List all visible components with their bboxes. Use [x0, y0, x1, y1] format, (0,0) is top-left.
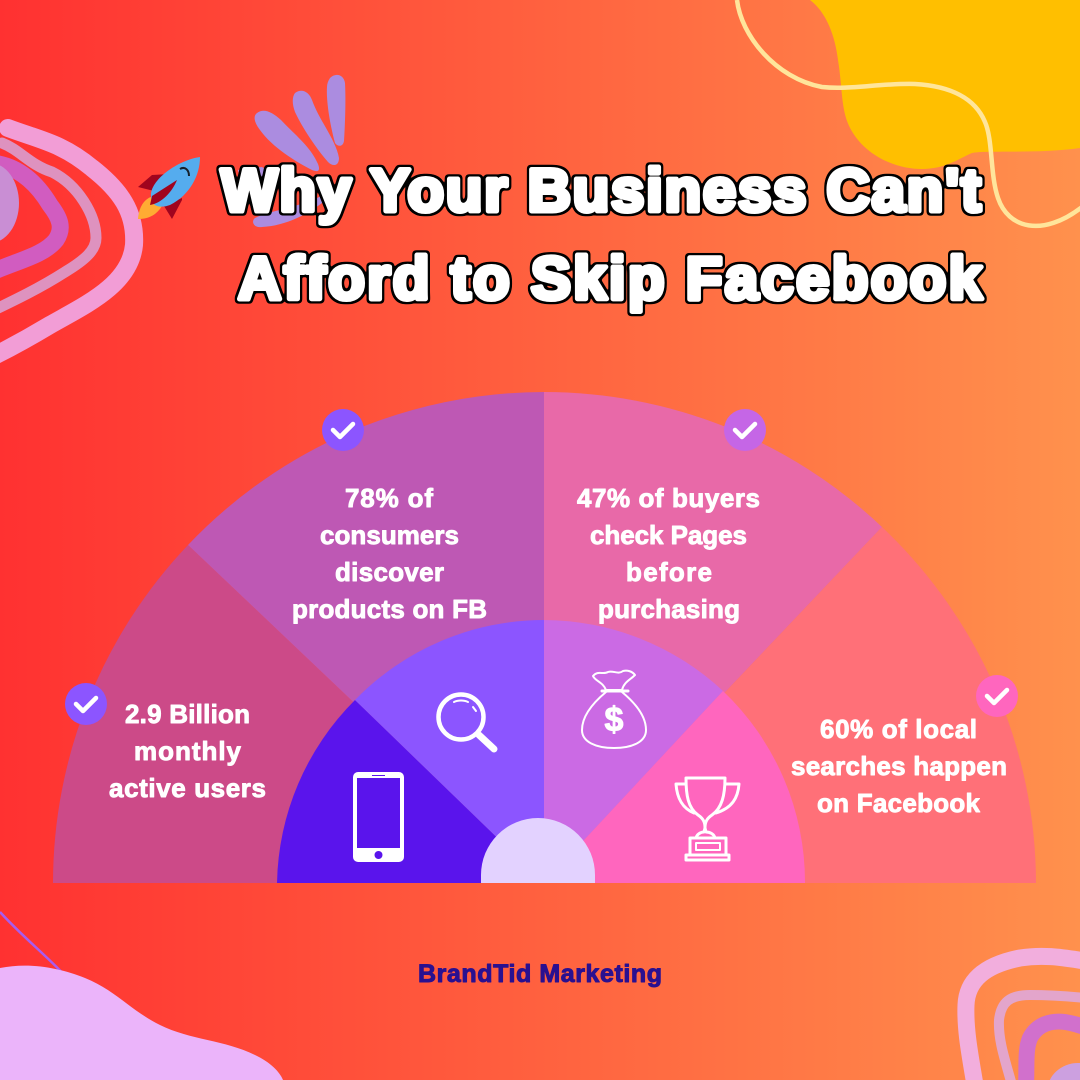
text: 47 percent — [577, 483, 760, 624]
text: 2.9 billion: 2.9 Billion — [125, 699, 250, 729]
badge: check discover — [322, 409, 364, 451]
text: 78 percent: products on FB — [292, 594, 487, 624]
inner segment: money — [544, 620, 723, 883]
footer brand: BrandTid Marketing — [418, 960, 662, 988]
text: 47 percent: 47% of buyers — [577, 483, 760, 513]
outer segment: users — [53, 545, 544, 883]
decoration: bottom left curve — [0, 912, 150, 1080]
icon: rocket — [138, 157, 200, 219]
inner segment: magnifier — [355, 620, 544, 883]
icon: money bag: $ — [605, 701, 624, 739]
text: 60 percent: searches happen — [791, 751, 1007, 781]
outer segment: discover — [188, 392, 544, 883]
title: Why Your Business Can't — [221, 157, 981, 224]
text: 47 percent: before — [626, 557, 712, 587]
outer segment: buyers — [544, 392, 882, 883]
text: 60 percent: on Facebook — [817, 788, 981, 818]
decoration: yellow blob top right — [810, 0, 1080, 169]
inner segment: trophy — [544, 691, 805, 883]
text: 78 percent — [292, 483, 487, 624]
decoration: left swirl — [0, 128, 134, 358]
text: 78 percent: discover — [335, 557, 444, 587]
inner segment: phone — [277, 700, 544, 883]
fan chart — [53, 392, 1036, 883]
title — [221, 157, 983, 312]
icon: phone — [353, 772, 404, 862]
decoration: cream curve top right — [737, 0, 1080, 226]
text: 2.9 billion: active users — [109, 773, 266, 803]
center semicircle — [481, 818, 595, 883]
badge: check local — [976, 675, 1018, 717]
decoration: bottom right swirl — [966, 956, 1080, 1080]
text: 47 percent: purchasing — [598, 594, 740, 624]
text: 78 percent: consumers — [320, 520, 459, 550]
badge: check buyers — [724, 409, 766, 451]
text: 60 percent — [791, 714, 1007, 818]
decoration: purple spark lines — [238, 75, 345, 227]
text: 2.9 billion — [109, 699, 266, 803]
text: 60 percent: 60% of local — [820, 714, 977, 744]
text: 47 percent: check Pages — [590, 520, 747, 550]
title: Afford to Skip Facebook — [238, 245, 983, 312]
icon: trophy — [676, 778, 739, 860]
icon: money bag — [582, 671, 646, 748]
decoration: bottom left blob — [0, 966, 283, 1080]
outer segment: local search — [544, 527, 1036, 883]
text: 78 percent: 78% of — [345, 483, 433, 513]
badge: check users — [65, 683, 107, 725]
text: 2.9 billion: monthly — [134, 736, 242, 766]
icon: magnifier — [438, 694, 494, 749]
